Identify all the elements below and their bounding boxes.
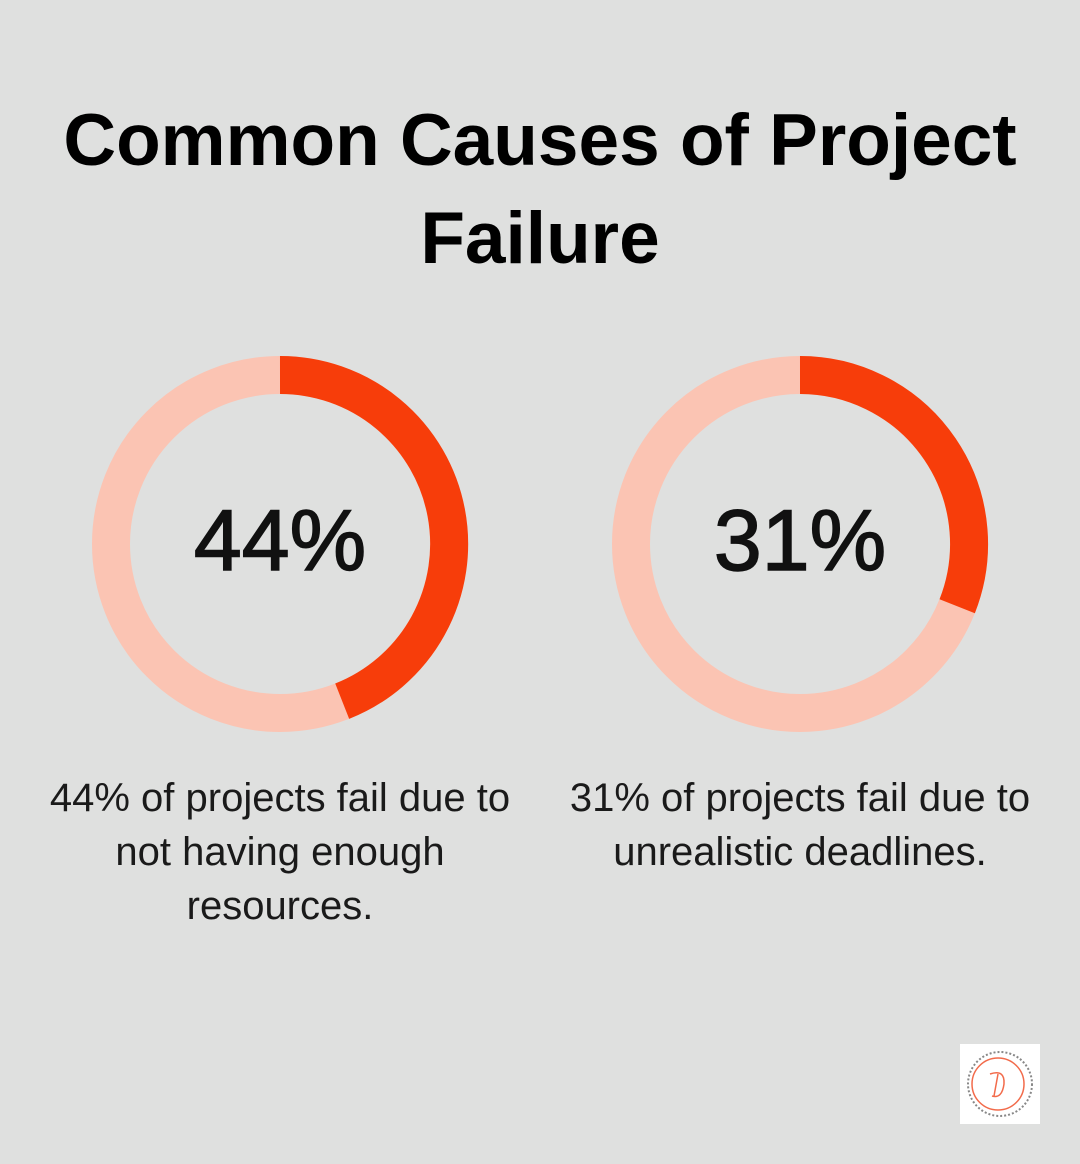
donut: 31%: 31%	[714, 493, 886, 589]
donut: 44%: 44%	[194, 493, 366, 589]
caption: 44%: not having enough	[115, 830, 445, 874]
title: Failure	[420, 198, 660, 279]
donut: 44%	[111, 375, 449, 713]
caption: 31%: 31% of projects fail due to	[570, 776, 1030, 820]
caption: 44%: 44% of projects fail due to	[50, 776, 510, 820]
caption: 44%	[50, 776, 510, 928]
logo	[960, 1044, 1040, 1124]
donut: 31%	[631, 375, 969, 713]
donut charts	[92, 356, 988, 732]
caption: 31%: unrealistic deadlines.	[613, 830, 987, 874]
title	[63, 100, 1017, 279]
caption: 44%: resources.	[187, 884, 373, 928]
caption: 31%	[570, 776, 1030, 874]
title: Common Causes of Project	[63, 100, 1017, 181]
